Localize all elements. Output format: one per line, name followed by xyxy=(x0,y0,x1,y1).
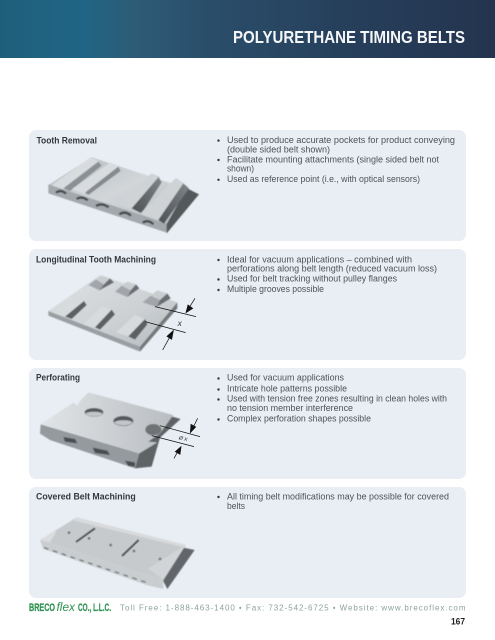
bullet list: longitudinal tooth machining xyxy=(217,254,437,294)
dimension lines: diameter x: Ø X xyxy=(177,435,189,443)
heading: tooth removal: Tooth Removal xyxy=(36,136,97,146)
heading: perforating: Perforating xyxy=(36,373,80,384)
dimension lines: x xyxy=(145,298,196,350)
company logo: BRECO xyxy=(29,602,55,614)
bullet list: perforating xyxy=(217,373,447,424)
bullet list: tooth removal: (double sided belt shown) xyxy=(227,144,330,154)
heading: longitudinal tooth machining: Longitudinal Tooth Machining xyxy=(36,254,156,265)
dimension lines: x: X xyxy=(176,321,182,328)
bullet list: tooth removal xyxy=(217,135,455,184)
bullet list: tooth removal: shown) xyxy=(227,164,254,174)
bullet list: longitudinal tooth machining: perforations along belt length (reduced vacuum loss) xyxy=(227,264,437,274)
bullet list: longitudinal tooth machining: Multiple grooves possible xyxy=(227,284,324,294)
heading: covered belt machining: Covered Belt Machining xyxy=(36,491,136,502)
company logo: flex xyxy=(56,600,76,614)
icon: belt with machined teeth xyxy=(48,275,196,352)
icon: perforated belt xyxy=(40,392,200,468)
bullet list: perforating: Complex perforation shapes possible xyxy=(227,414,371,424)
bullet list: tooth removal: Facilitate mounting attachments (single sided belt not xyxy=(227,154,439,164)
contact details: Toll Free: 1-888-463-1400 • Fax: 732-542-6725 • Website: www.brecoflex.com xyxy=(120,604,466,613)
bullet list: perforating: Used with tension free zones resulting in clean holes with xyxy=(227,394,447,404)
panel: tooth removal xyxy=(29,130,466,241)
panel: perforating xyxy=(29,368,466,479)
bullet list: covered belt machining: belts xyxy=(227,501,245,511)
bullet list: tooth removal: Used to produce accurate pockets for product conveying xyxy=(227,135,455,145)
icon: covered belt xyxy=(40,517,195,589)
page number: 167 xyxy=(451,617,465,627)
bullet list: perforating: Intricate hole patterns possible xyxy=(227,384,347,394)
bullet list: longitudinal tooth machining: Used for belt tracking without pulley flanges xyxy=(227,274,397,284)
bullet list: tooth removal: Used as reference point (i.e., with optical sensors) xyxy=(227,174,420,184)
bullet list: perforating: no tension member interference xyxy=(227,403,353,413)
company logo xyxy=(29,600,111,614)
footer: company and contact line xyxy=(29,600,466,627)
bullet list: covered belt machining: All timing belt modifications may be possible for covered xyxy=(227,491,449,501)
icon: belt with tooth removed xyxy=(48,157,199,233)
panel: covered belt machining xyxy=(29,487,466,598)
bullet list: perforating: Used for vacuum applications xyxy=(227,373,344,383)
title: POLYURETHANE TIMING BELTS xyxy=(233,27,465,47)
dimension lines: diameter x xyxy=(152,418,200,458)
company logo: CO., L.L.C. xyxy=(78,602,111,614)
panel: longitudinal tooth machining xyxy=(29,249,466,360)
header banner xyxy=(0,0,495,58)
bullet list: longitudinal tooth machining: Ideal for vacuum applications – combined with xyxy=(227,254,412,264)
bullet list: covered belt machining xyxy=(217,491,449,511)
